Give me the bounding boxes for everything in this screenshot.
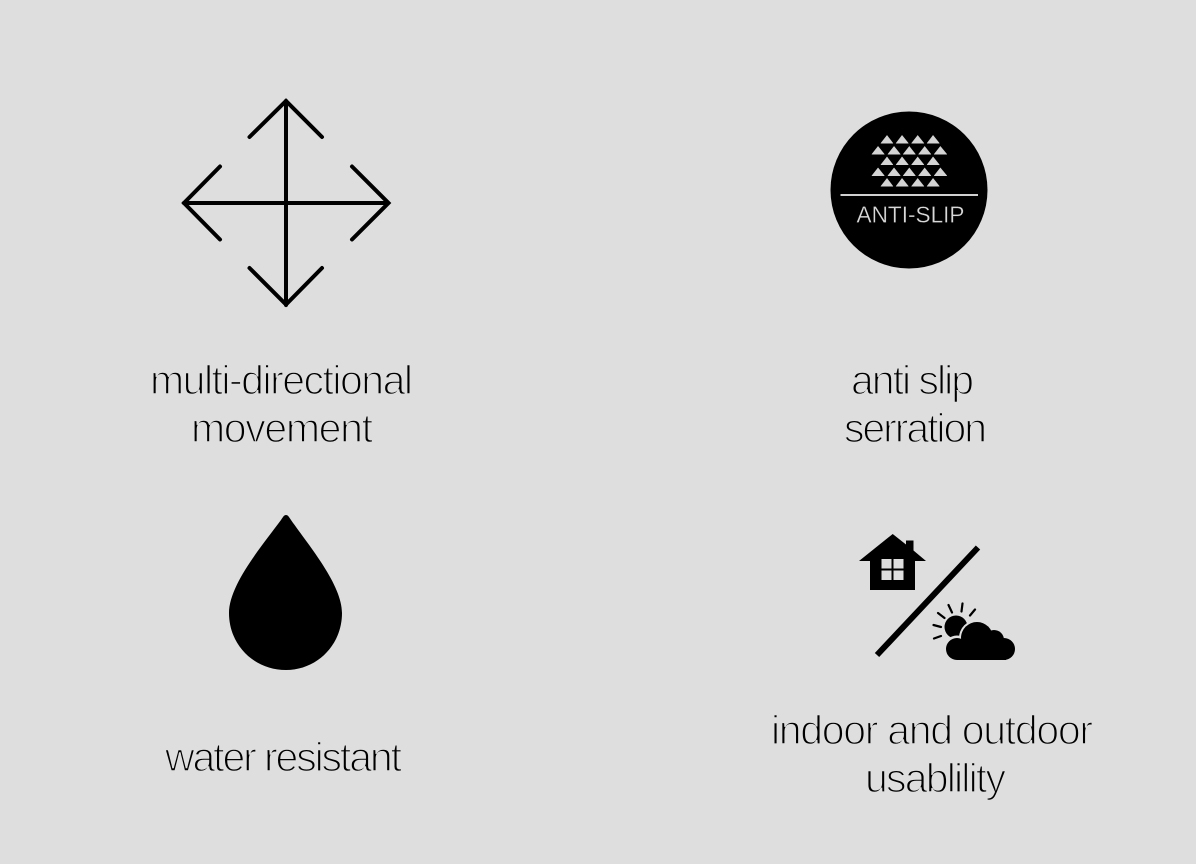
text: anti slip serration: serration xyxy=(844,405,987,451)
icon: indoor and outdoor xyxy=(859,534,1015,662)
icon: sun and cloud xyxy=(934,604,1015,662)
icon: anti-slip badge: ANTI-SLIP xyxy=(856,202,964,228)
text: anti slip serration xyxy=(844,357,987,451)
text: multi-directional movement: movement xyxy=(191,405,374,451)
icon: anti-slip badge xyxy=(830,112,988,268)
text: indoor and outdoor usablility: usablility xyxy=(865,755,1006,801)
text: multi-directional movement: multi-directional xyxy=(150,357,413,403)
text: anti slip serration: anti slip xyxy=(851,357,974,403)
text: water resistant: water resistant xyxy=(164,734,403,780)
text: indoor and outdoor usablility xyxy=(771,707,1093,801)
text: indoor and outdoor usablility: indoor and outdoor xyxy=(771,707,1093,753)
icon: four-way arrows xyxy=(184,101,388,305)
icon: slash xyxy=(877,548,978,655)
icon: water drop xyxy=(229,515,342,670)
icon: house xyxy=(859,534,926,590)
text: multi-directional movement xyxy=(150,357,413,451)
